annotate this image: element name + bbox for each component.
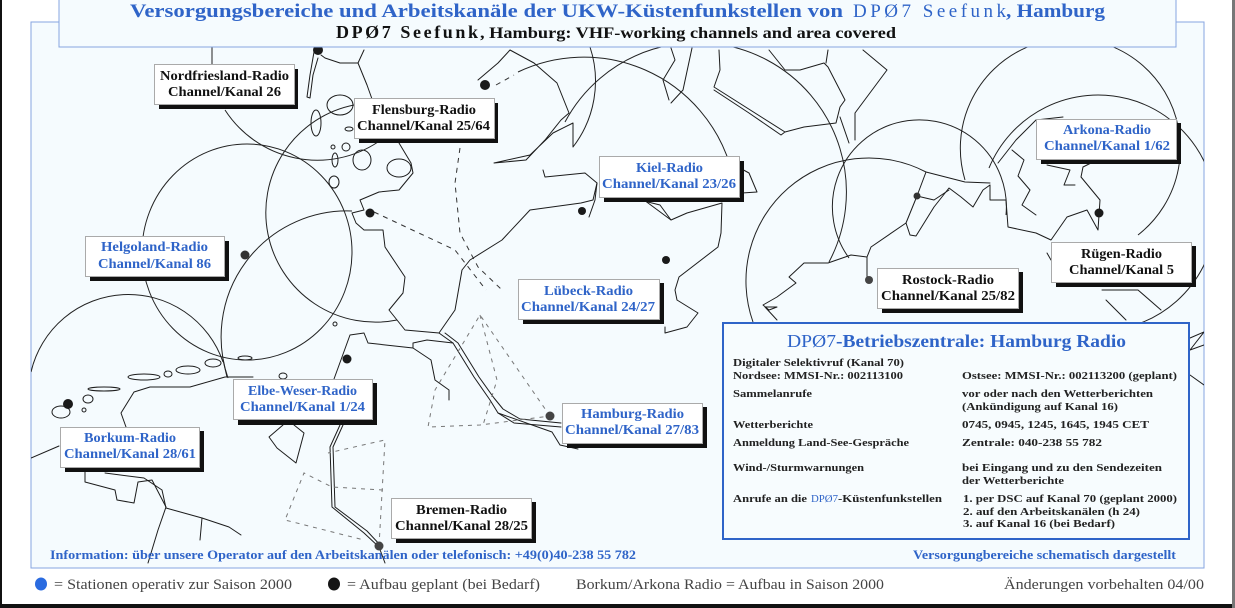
legend: planned stations: = Aufbau geplant (bei Bedarf) bbox=[347, 577, 540, 593]
label: Lübeck-Radio bbox=[518, 280, 664, 324]
title in German: Versorgungsbereiche und Arbeitskanäle der UKW-Küstenfunkstellen von bbox=[130, 1, 844, 22]
label: Helgoland-Radio: Helgoland-Radio bbox=[101, 240, 208, 255]
label: Bremen-Radio: Bremen-Radio bbox=[416, 503, 507, 518]
label: Rostock-Radio bbox=[878, 268, 1023, 313]
label: Elbe-Weser-Radio: Elbe-Weser-Radio bbox=[248, 384, 357, 399]
legend: changes note: Änderungen vorbehalten 04/00 bbox=[1004, 576, 1204, 593]
left column: Anmeldung Land-See-Gespräche bbox=[733, 437, 909, 449]
panel: DPØ7 operations centre bbox=[723, 323, 1189, 539]
left column: Anrufe an die bbox=[733, 493, 807, 505]
right column: bei Eingang und zu den Sendezeiten bbox=[962, 462, 1162, 474]
panel: title banner bbox=[59, 0, 1176, 47]
label: Nordfriesland-Radio bbox=[154, 64, 298, 109]
label: Bremen-Radio: Channel/Kanal 28/25 bbox=[395, 519, 528, 534]
station dots bbox=[63, 45, 1104, 550]
label: Rostock-Radio: Rostock-Radio bbox=[902, 273, 994, 288]
label: Hamburg-Radio: Channel/Kanal 27/83 bbox=[565, 423, 699, 438]
right column: (Ankündigung auf Kanal 16) bbox=[962, 401, 1118, 413]
label: Rostock-Radio: Channel/Kanal 25/82 bbox=[881, 289, 1015, 304]
label: Borkum-Radio: Borkum-Radio bbox=[84, 431, 176, 446]
right column: 2. auf den Arbeitskanälen (h 24) bbox=[963, 506, 1140, 518]
label: Arkona-Radio: Channel/Kanal 1/62 bbox=[1044, 139, 1170, 154]
right column: der Wetterberichte bbox=[962, 475, 1064, 487]
left column: DPØ7 bbox=[811, 493, 838, 505]
label: Bremen-Radio bbox=[392, 498, 536, 543]
label: Nordfriesland-Radio: Channel/Kanal 26 bbox=[168, 85, 281, 100]
right column: Ostsee: MMSI-Nr.: 002113200 (geplant) bbox=[962, 370, 1177, 382]
left column: -Küstenfunkstellen bbox=[838, 493, 942, 505]
label: Arkona-Radio bbox=[1036, 120, 1181, 164]
label: Helgoland-Radio: Channel/Kanal 86 bbox=[98, 257, 211, 272]
panel heading: DPØ7 bbox=[787, 331, 836, 351]
right column: 1. per DSC auf Kanal 70 (geplant 2000) bbox=[963, 493, 1177, 505]
label: Borkum-Radio bbox=[60, 428, 204, 472]
legend: Borkum and Arkona note: Borkum/Arkona Radio = Aufbau in Saison 2000 bbox=[576, 577, 884, 593]
label: Flensburg-Radio: Flensburg-Radio bbox=[372, 103, 476, 118]
footer note: information: Information: über unsere Operator auf den Arbeitskanälen oder telefonisch: +49(0)40-238 55 782 bbox=[50, 547, 636, 562]
subtitle in English: DPØ7 Seefunk bbox=[336, 22, 478, 42]
dashed sector lines bbox=[285, 75, 550, 546]
label: Rügen-Radio bbox=[1052, 242, 1196, 287]
left column: Digitaler Selektivruf (Kanal 70) bbox=[733, 357, 904, 369]
right column: 3. auf Kanal 16 (bei Bedarf) bbox=[963, 518, 1115, 530]
label: Flensburg-Radio: Channel/Kanal 25/64 bbox=[357, 119, 490, 134]
islands bbox=[52, 95, 411, 418]
title in German: , Hamburg bbox=[1006, 1, 1106, 22]
subtitle in English bbox=[336, 22, 896, 42]
label: Arkona-Radio: Arkona-Radio bbox=[1063, 123, 1151, 138]
coverage circles bbox=[31, 38, 1216, 378]
footer note: schematic coverage: Versorgungbereiche schematisch dargestellt bbox=[913, 547, 1177, 562]
label: Kiel-Radio: Channel/Kanal 23/26 bbox=[602, 177, 736, 192]
label: Lübeck-Radio: Lübeck-Radio bbox=[544, 284, 633, 299]
title in German: DPØ7 Seefunk bbox=[853, 1, 1006, 22]
label: Rügen-Radio: Channel/Kanal 5 bbox=[1069, 263, 1174, 278]
label: Flensburg-Radio bbox=[354, 98, 498, 143]
label: Rügen-Radio: Rügen-Radio bbox=[1081, 247, 1162, 262]
label: Borkum-Radio: Channel/Kanal 28/61 bbox=[64, 447, 196, 462]
label: Kiel-Radio bbox=[600, 156, 744, 202]
right column bbox=[962, 370, 1177, 530]
right column: Zentrale: 040-238 55 782 bbox=[962, 437, 1103, 449]
panel heading: -Betriebszentrale: Hamburg Radio bbox=[836, 331, 1126, 351]
legend: operating stations: = Stationen operativ zur Saison 2000 bbox=[54, 577, 292, 593]
label: Elbe-Weser-Radio: Channel/Kanal 1/24 bbox=[240, 400, 365, 415]
right column: vor oder nach den Wetterberichten bbox=[962, 388, 1153, 400]
left column: Wetterberichte bbox=[733, 419, 813, 431]
label: Nordfriesland-Radio: Nordfriesland-Radio bbox=[160, 69, 289, 84]
subtitle in English: , Hamburg: VHF-working channels and area covered bbox=[480, 25, 896, 42]
right column: 0745, 0945, 1245, 1645, 1945 CET bbox=[962, 419, 1150, 431]
left column: Sammelanrufe bbox=[733, 388, 812, 400]
title in German bbox=[130, 1, 1106, 22]
label: Lübeck-Radio: Channel/Kanal 24/27 bbox=[521, 300, 655, 315]
label: Hamburg-Radio: Hamburg-Radio bbox=[581, 407, 684, 422]
label: Helgoland-Radio bbox=[86, 236, 229, 281]
left column bbox=[733, 357, 942, 505]
label: Kiel-Radio: Kiel-Radio bbox=[636, 161, 703, 176]
label: Elbe-Weser-Radio bbox=[234, 380, 377, 425]
left column: Wind-/Sturmwarnungen bbox=[733, 462, 864, 474]
left column: Nordsee: MMSI-Nr.: 002113100 bbox=[733, 370, 904, 382]
label: Hamburg-Radio bbox=[562, 404, 707, 448]
